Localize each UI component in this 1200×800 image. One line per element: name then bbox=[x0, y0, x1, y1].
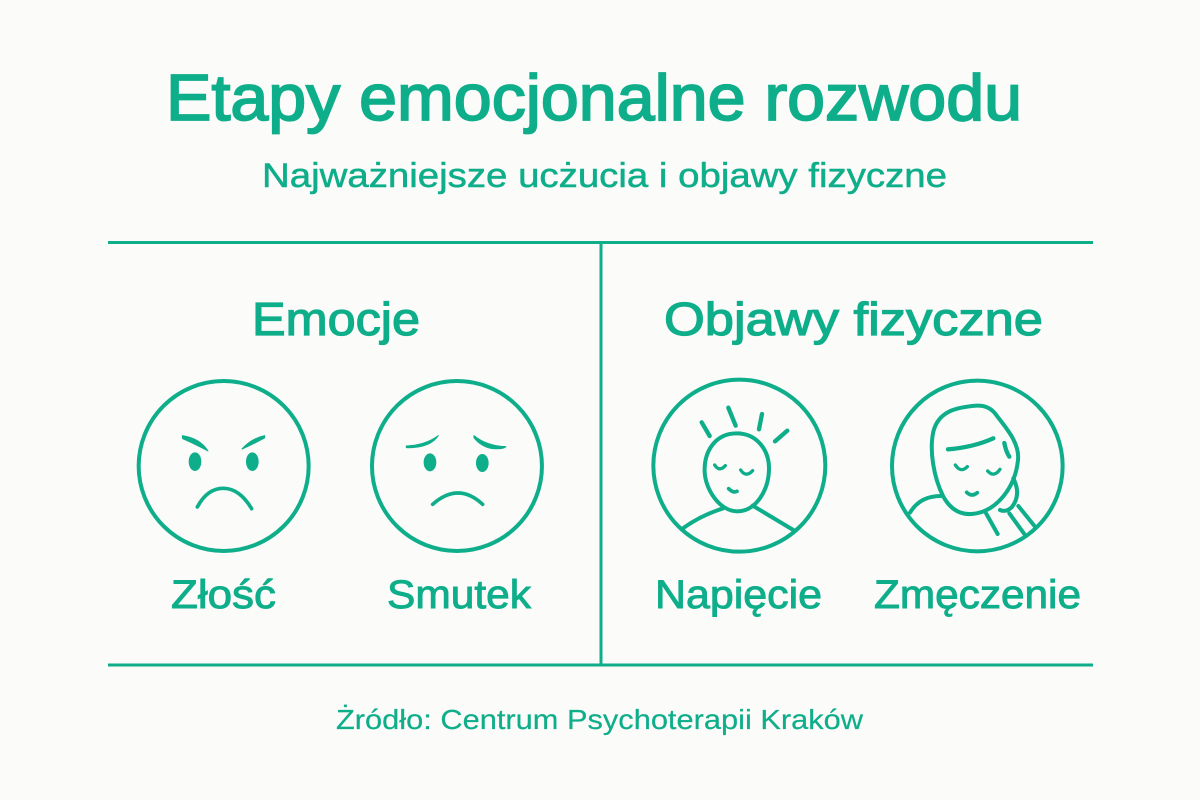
icon: tired head resting on hand bbox=[892, 381, 1063, 551]
label: Napięcie: Napięcie bbox=[655, 573, 822, 617]
icon: tension head bbox=[653, 380, 825, 552]
label: Złość: Złość bbox=[171, 573, 276, 617]
subtitle: Najważniejsze ucżucia i objawy fizyczne bbox=[262, 157, 947, 195]
icon: angry face bbox=[139, 381, 309, 551]
title: Etapy emocjonalne rozwodu bbox=[166, 61, 1022, 134]
icon: sad face bbox=[372, 381, 542, 551]
label: Zmęczenie: Zmęczenie bbox=[874, 573, 1081, 617]
heading: Emocje: Emocje bbox=[252, 293, 420, 345]
source note: Żródło: Centrum Psychoterapii Kraków bbox=[336, 704, 864, 735]
table frame lines bbox=[108, 242, 1093, 665]
heading: Objawy fizyczne: Objawy fizyczne bbox=[664, 293, 1043, 345]
label: Smutek: Smutek bbox=[387, 573, 532, 617]
